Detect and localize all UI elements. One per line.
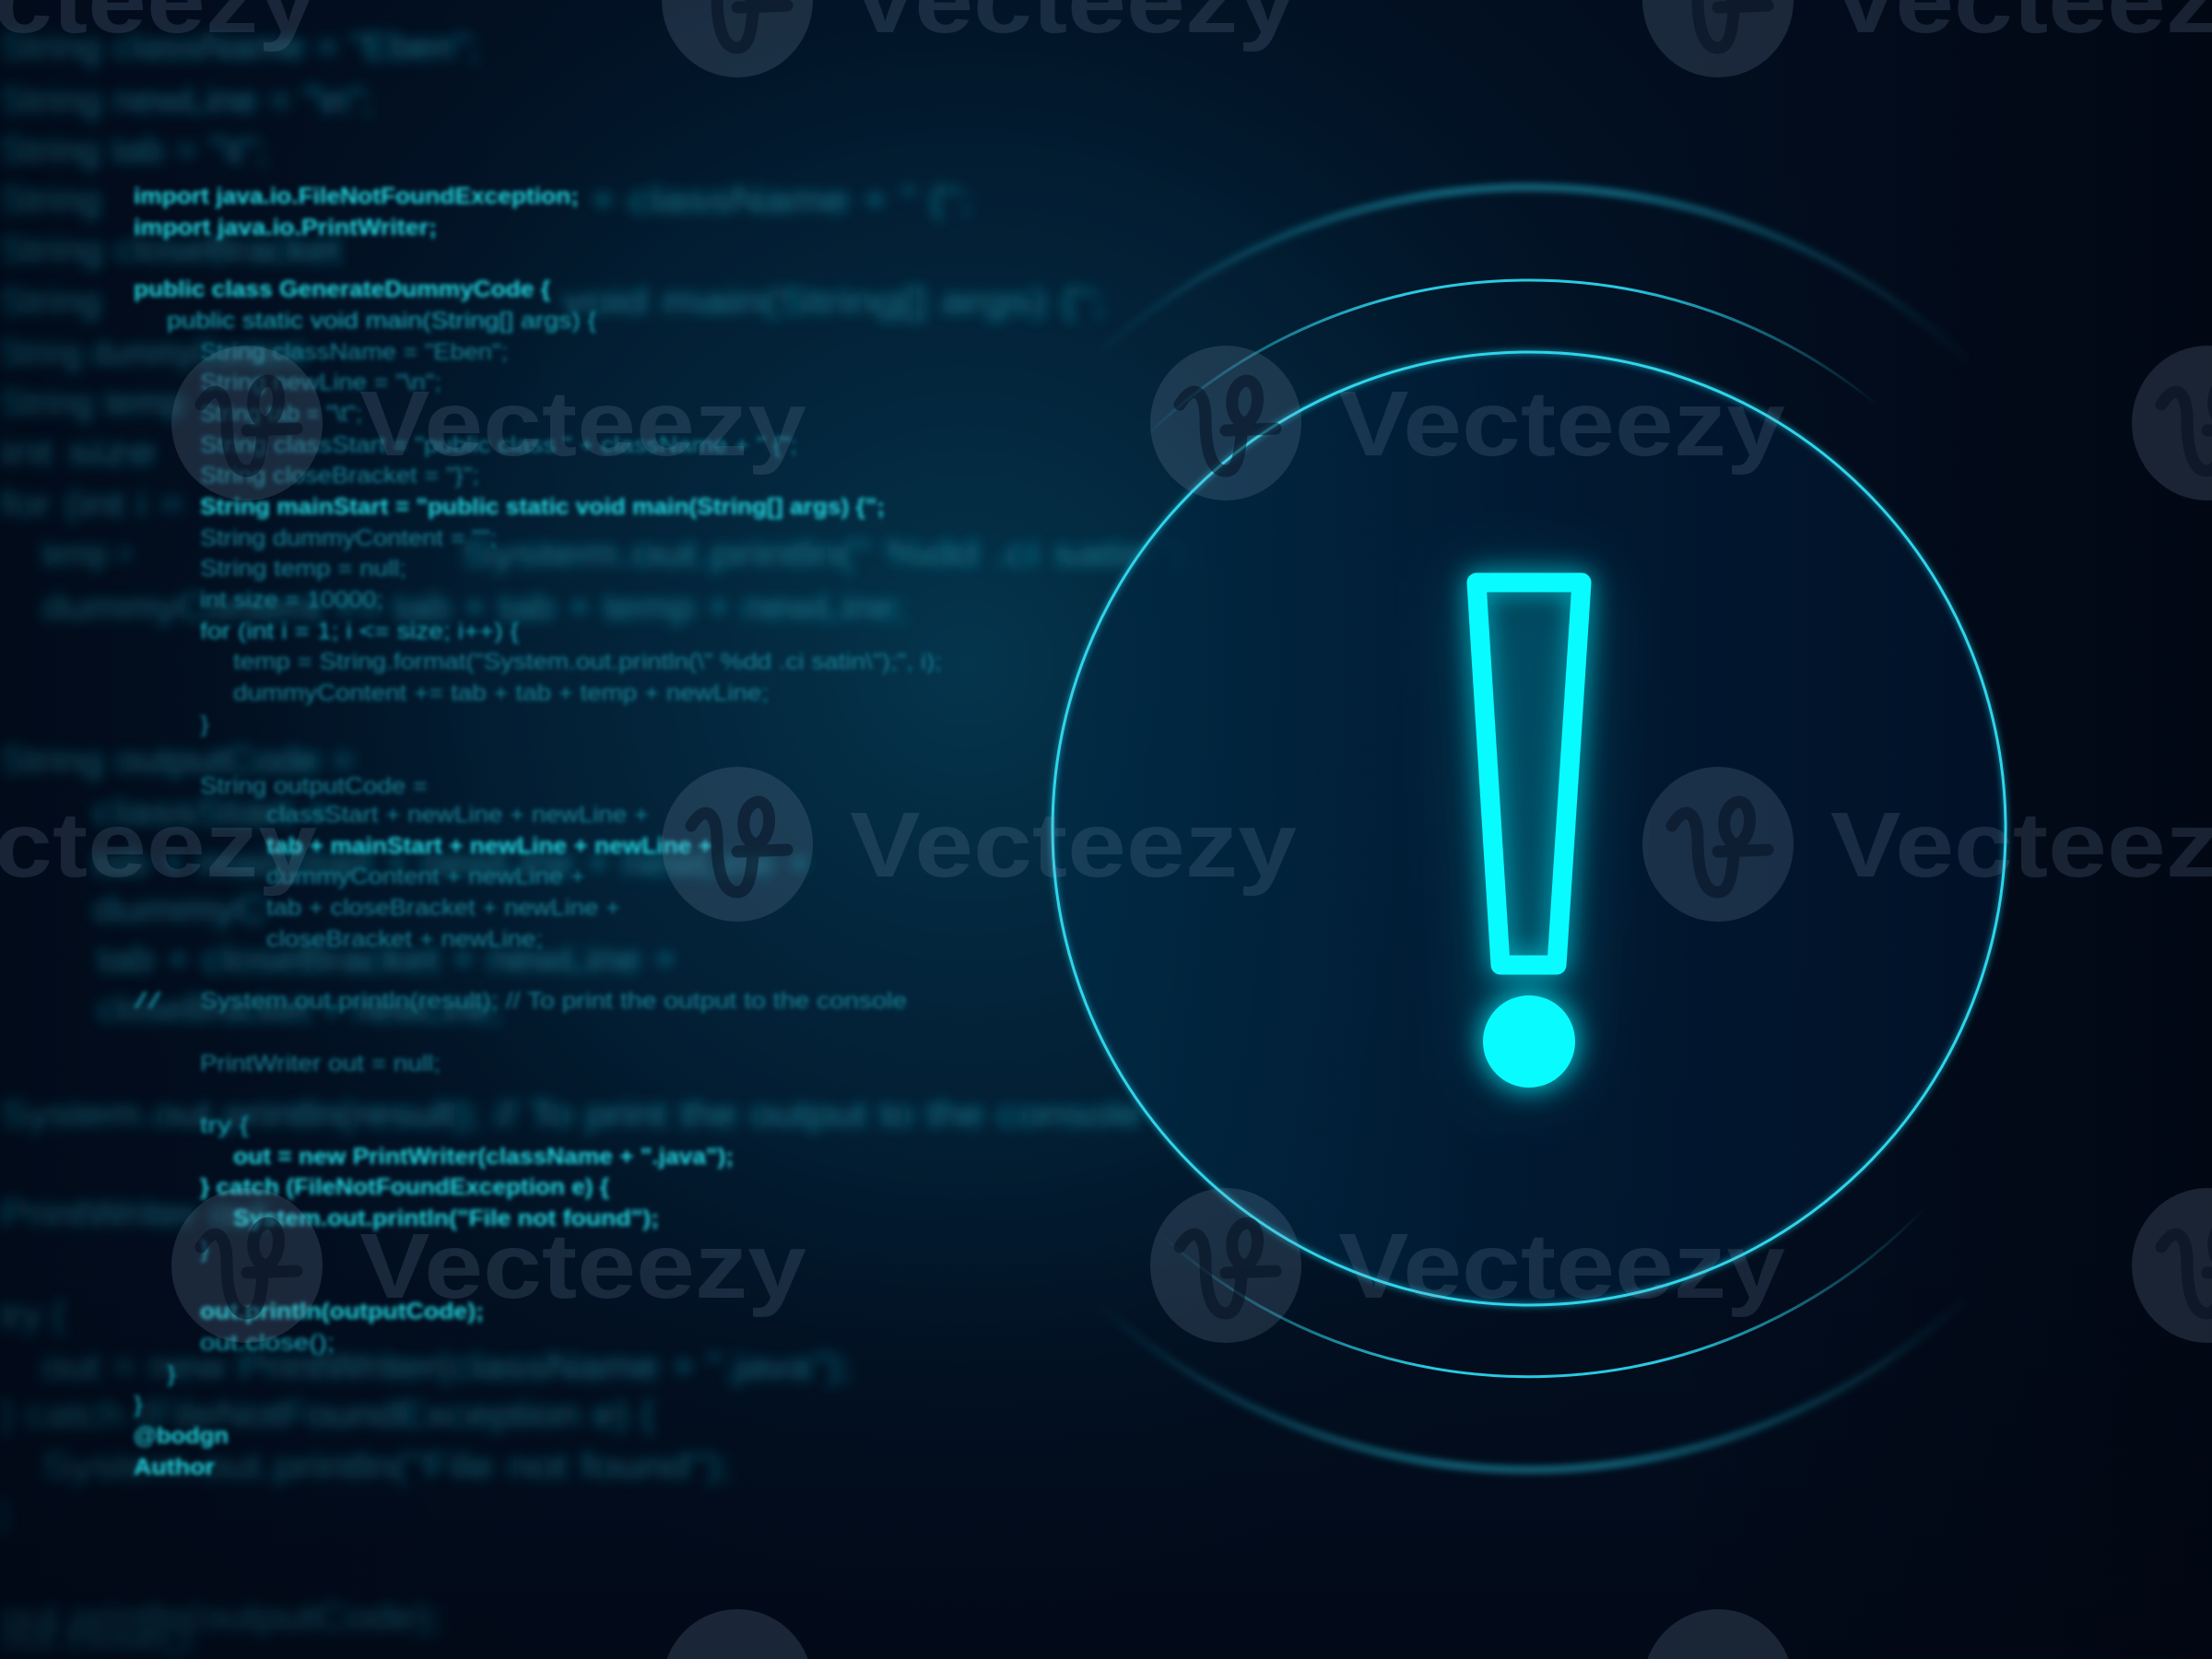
blurred foreground code text: String dummyContent	[0, 333, 304, 373]
blurred foreground code text: System.out.println(result); // To print the output to the console	[0, 1094, 1143, 1135]
in-focus code listing: String dummyContent = "";	[200, 525, 497, 551]
blurred foreground code text: String className = "Eben";	[0, 27, 479, 67]
blurred foreground code text: int size	[0, 432, 157, 473]
in-focus code listing: }	[167, 1361, 176, 1387]
blurred foreground code text: }	[0, 1494, 9, 1535]
in-focus code listing: } catch (FileNotFoundException e) {	[200, 1174, 609, 1200]
watermark row 4: Vecteezy	[359, 1215, 806, 1318]
in-focus code listing: closeBracket + newLine;	[266, 926, 543, 952]
blurred foreground code text: out.println(outputCode);	[0, 1597, 442, 1638]
in-focus code listing: }	[134, 1392, 143, 1418]
in-focus code listing: }	[200, 1237, 209, 1263]
blurred foreground code text: String tab = "\t";	[0, 130, 267, 171]
blurred foreground code text: dummyContent += tab + tab + temp + newLine;	[41, 587, 908, 628]
in-focus code listing: PrintWriter out = null;	[200, 1051, 441, 1077]
blurred foreground code text: } catch (FileNotFoundException e) {	[0, 1394, 654, 1435]
watermark row 4	[171, 1188, 2212, 1343]
blurred foreground code text: System.out.println("File not found");	[41, 1446, 733, 1487]
in-focus code listing: out.println(outputCode);	[200, 1299, 484, 1324]
in-focus code listing: Author	[134, 1454, 215, 1480]
blurred foreground code text: tab + mainStart + newLine + newLine +	[92, 843, 811, 884]
blurred foreground code text	[0, 27, 1198, 1658]
icon: exclamation mark	[1465, 581, 1593, 1090]
in-focus code listing: //	[134, 988, 161, 1014]
watermark row 3: Vecteezy	[850, 794, 1297, 897]
in-focus code listing: String classStart = "public class " + className + " {";	[200, 432, 797, 458]
in-focus code listing: String outputCode =	[200, 773, 428, 799]
watermark row 3	[0, 767, 2212, 922]
in-focus code listing: int size = 10000;	[200, 587, 383, 613]
in-focus code listing: out = new PrintWriter(className + ".java");	[233, 1144, 734, 1170]
outer blurred ring arcs	[1097, 187, 1972, 1470]
blurred foreground code text: dummyC	[92, 889, 267, 930]
blurred foreground code text: tab + closeBracket + newLine +	[97, 939, 677, 980]
blurred foreground code text: String	[0, 281, 101, 322]
in-focus code listing: classStart + newLine + newLine +	[266, 802, 649, 828]
watermark row 2	[171, 346, 2212, 500]
blurred foreground code text: try {	[0, 1295, 65, 1335]
in-focus code listing: import java.io.FileNotFoundException;	[134, 183, 579, 209]
in-focus code listing: try {	[200, 1112, 249, 1138]
blurred foreground code text: + className + " {";	[590, 180, 972, 220]
blurred foreground code text: String	[0, 180, 101, 220]
in-focus code listing: dummyContent + newLine +	[266, 864, 585, 889]
blurred foreground code text: String closeBracket	[0, 229, 341, 270]
in-focus code listing: out.close();	[200, 1330, 335, 1356]
in-focus code listing: System.out.println("File not found");	[233, 1206, 659, 1231]
in-focus code listing: for (int i = 1; i <= size; i++) {	[200, 618, 519, 644]
blurred foreground code text: String temp	[0, 382, 184, 423]
in-focus code listing: @bodgn	[134, 1423, 229, 1449]
in-focus code listing: public class GenerateDummyCode {	[134, 276, 550, 302]
in-focus code listing: tab + closeBracket + newLine +	[266, 895, 620, 921]
in-focus code listing: System.out.println(result); // To print the output to the console	[200, 988, 907, 1014]
blurred foreground code text: closeBracket + newLine;	[97, 989, 502, 1030]
in-focus code listing: String closeBracket = "}";	[200, 463, 479, 488]
in-focus code listing: String mainStart = "public static void main(String[] args) {";	[200, 494, 885, 520]
in-focus code listing: String tab = "\t";	[200, 401, 362, 427]
in-focus code listing: String temp = null;	[200, 556, 406, 582]
in-focus code listing: String newLine = "\n";	[200, 370, 441, 395]
watermark row 1	[0, 0, 2212, 77]
watermark row 2: Vecteezy	[1338, 372, 1785, 476]
in-focus code listing: public static void main(String[] args) {	[167, 308, 596, 334]
main circle	[1053, 352, 2006, 1305]
blurred foreground code text: out = new PrintWriter(className + ".java");	[41, 1347, 853, 1387]
watermark row 5 logo tops	[666, 1609, 1789, 1659]
blurred foreground code text: PrintWriter out	[0, 1194, 267, 1234]
blurred foreground code text: String newLine = "\n";	[0, 80, 373, 121]
watermark row 4: Vecteezy	[1338, 1215, 1785, 1318]
blurred foreground code text: temp =	[41, 534, 134, 574]
in-focus code listing: dummyContent += tab + tab + temp + newLine;	[233, 680, 769, 706]
blurred foreground code text: String outputCode =	[0, 740, 355, 781]
in-focus code listing	[134, 183, 942, 1480]
in-focus code listing: }	[200, 712, 209, 737]
in-focus code listing: String className = "Eben";	[200, 339, 508, 365]
middle ring arcs	[1143, 280, 1926, 1377]
blurred foreground code text: classStart +	[92, 792, 332, 832]
watermark row 2: Vecteezy	[359, 372, 806, 476]
blurred foreground code text: void main(String[] args) {";	[562, 281, 1106, 322]
blurred foreground code text: System.out.println(" %dd .ci satin");	[461, 534, 1198, 574]
in-focus code listing: import java.io.PrintWriter;	[134, 215, 437, 241]
blurred foreground code text: for (int i =	[0, 484, 184, 524]
in-focus code listing: temp = String.format("System.out.println(\" %dd .ci satin\");", i);	[233, 649, 942, 675]
in-focus code listing: tab + mainStart + newLine + newLine +	[266, 833, 712, 859]
blurred foreground code text: out.close();	[0, 1618, 198, 1658]
watermark row 3: Vecteezy	[1830, 794, 2212, 897]
